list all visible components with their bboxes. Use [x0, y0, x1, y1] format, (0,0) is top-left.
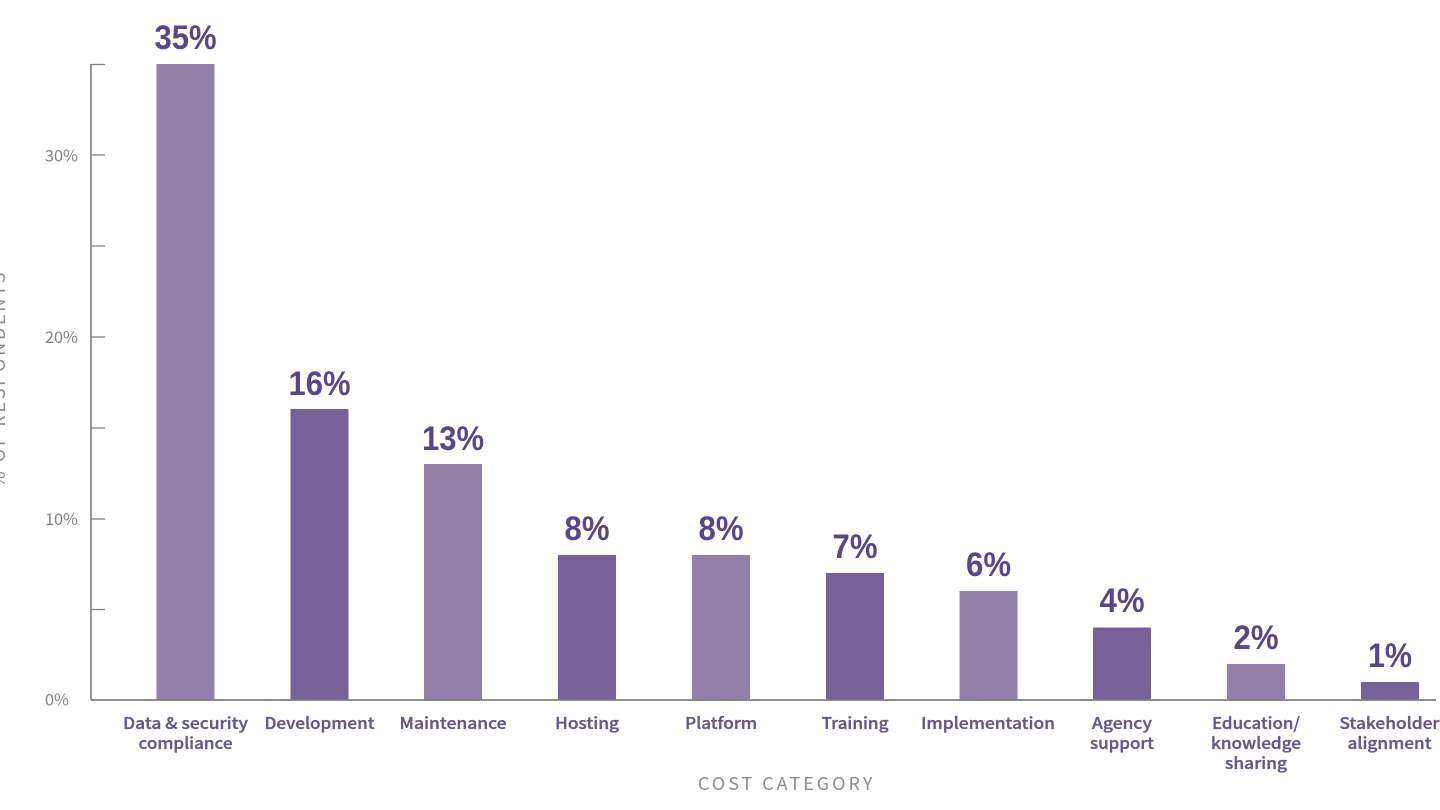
category labels: Education/: [1212, 710, 1300, 734]
value labels: 8%: [564, 510, 610, 548]
category labels: Hosting: [555, 710, 619, 734]
x axis title: COST CATEGORY: [698, 770, 875, 796]
category labels: [123, 710, 1440, 774]
value labels: 16%: [288, 365, 350, 403]
category labels: support: [1090, 730, 1155, 754]
category labels: Implementation: [921, 710, 1055, 734]
category labels: Maintenance: [400, 710, 506, 734]
value labels: 13%: [422, 420, 484, 458]
category labels: Data & security: [123, 710, 248, 734]
category labels: alignment: [1348, 730, 1432, 754]
y axis with ticks: [91, 64, 105, 700]
bars: [156, 64, 1419, 700]
y axis tick labels: 20%: [45, 324, 78, 348]
value labels: 1%: [1368, 637, 1412, 675]
value labels: 7%: [832, 528, 878, 566]
value labels: 6%: [966, 546, 1011, 584]
category labels: knowledge: [1211, 730, 1301, 754]
x axis baseline: [91, 699, 1436, 701]
value labels: 35%: [154, 19, 216, 57]
category labels: sharing: [1225, 750, 1287, 774]
category labels: Agency: [1092, 710, 1152, 734]
value labels: 4%: [1100, 582, 1144, 620]
value labels: 2%: [1234, 619, 1278, 657]
y axis tick labels: 0%: [45, 686, 69, 710]
category labels: Training: [822, 710, 888, 734]
y axis tick labels: [45, 142, 78, 710]
category labels: Platform: [685, 710, 757, 734]
y axis tick labels: 30%: [45, 142, 78, 166]
category labels: Development: [264, 710, 375, 734]
value labels: [154, 19, 1412, 675]
y axis tick labels: 10%: [45, 506, 78, 530]
value labels: 8%: [698, 510, 744, 548]
category labels: compliance: [138, 730, 232, 754]
category labels: Stakeholder: [1340, 710, 1440, 734]
